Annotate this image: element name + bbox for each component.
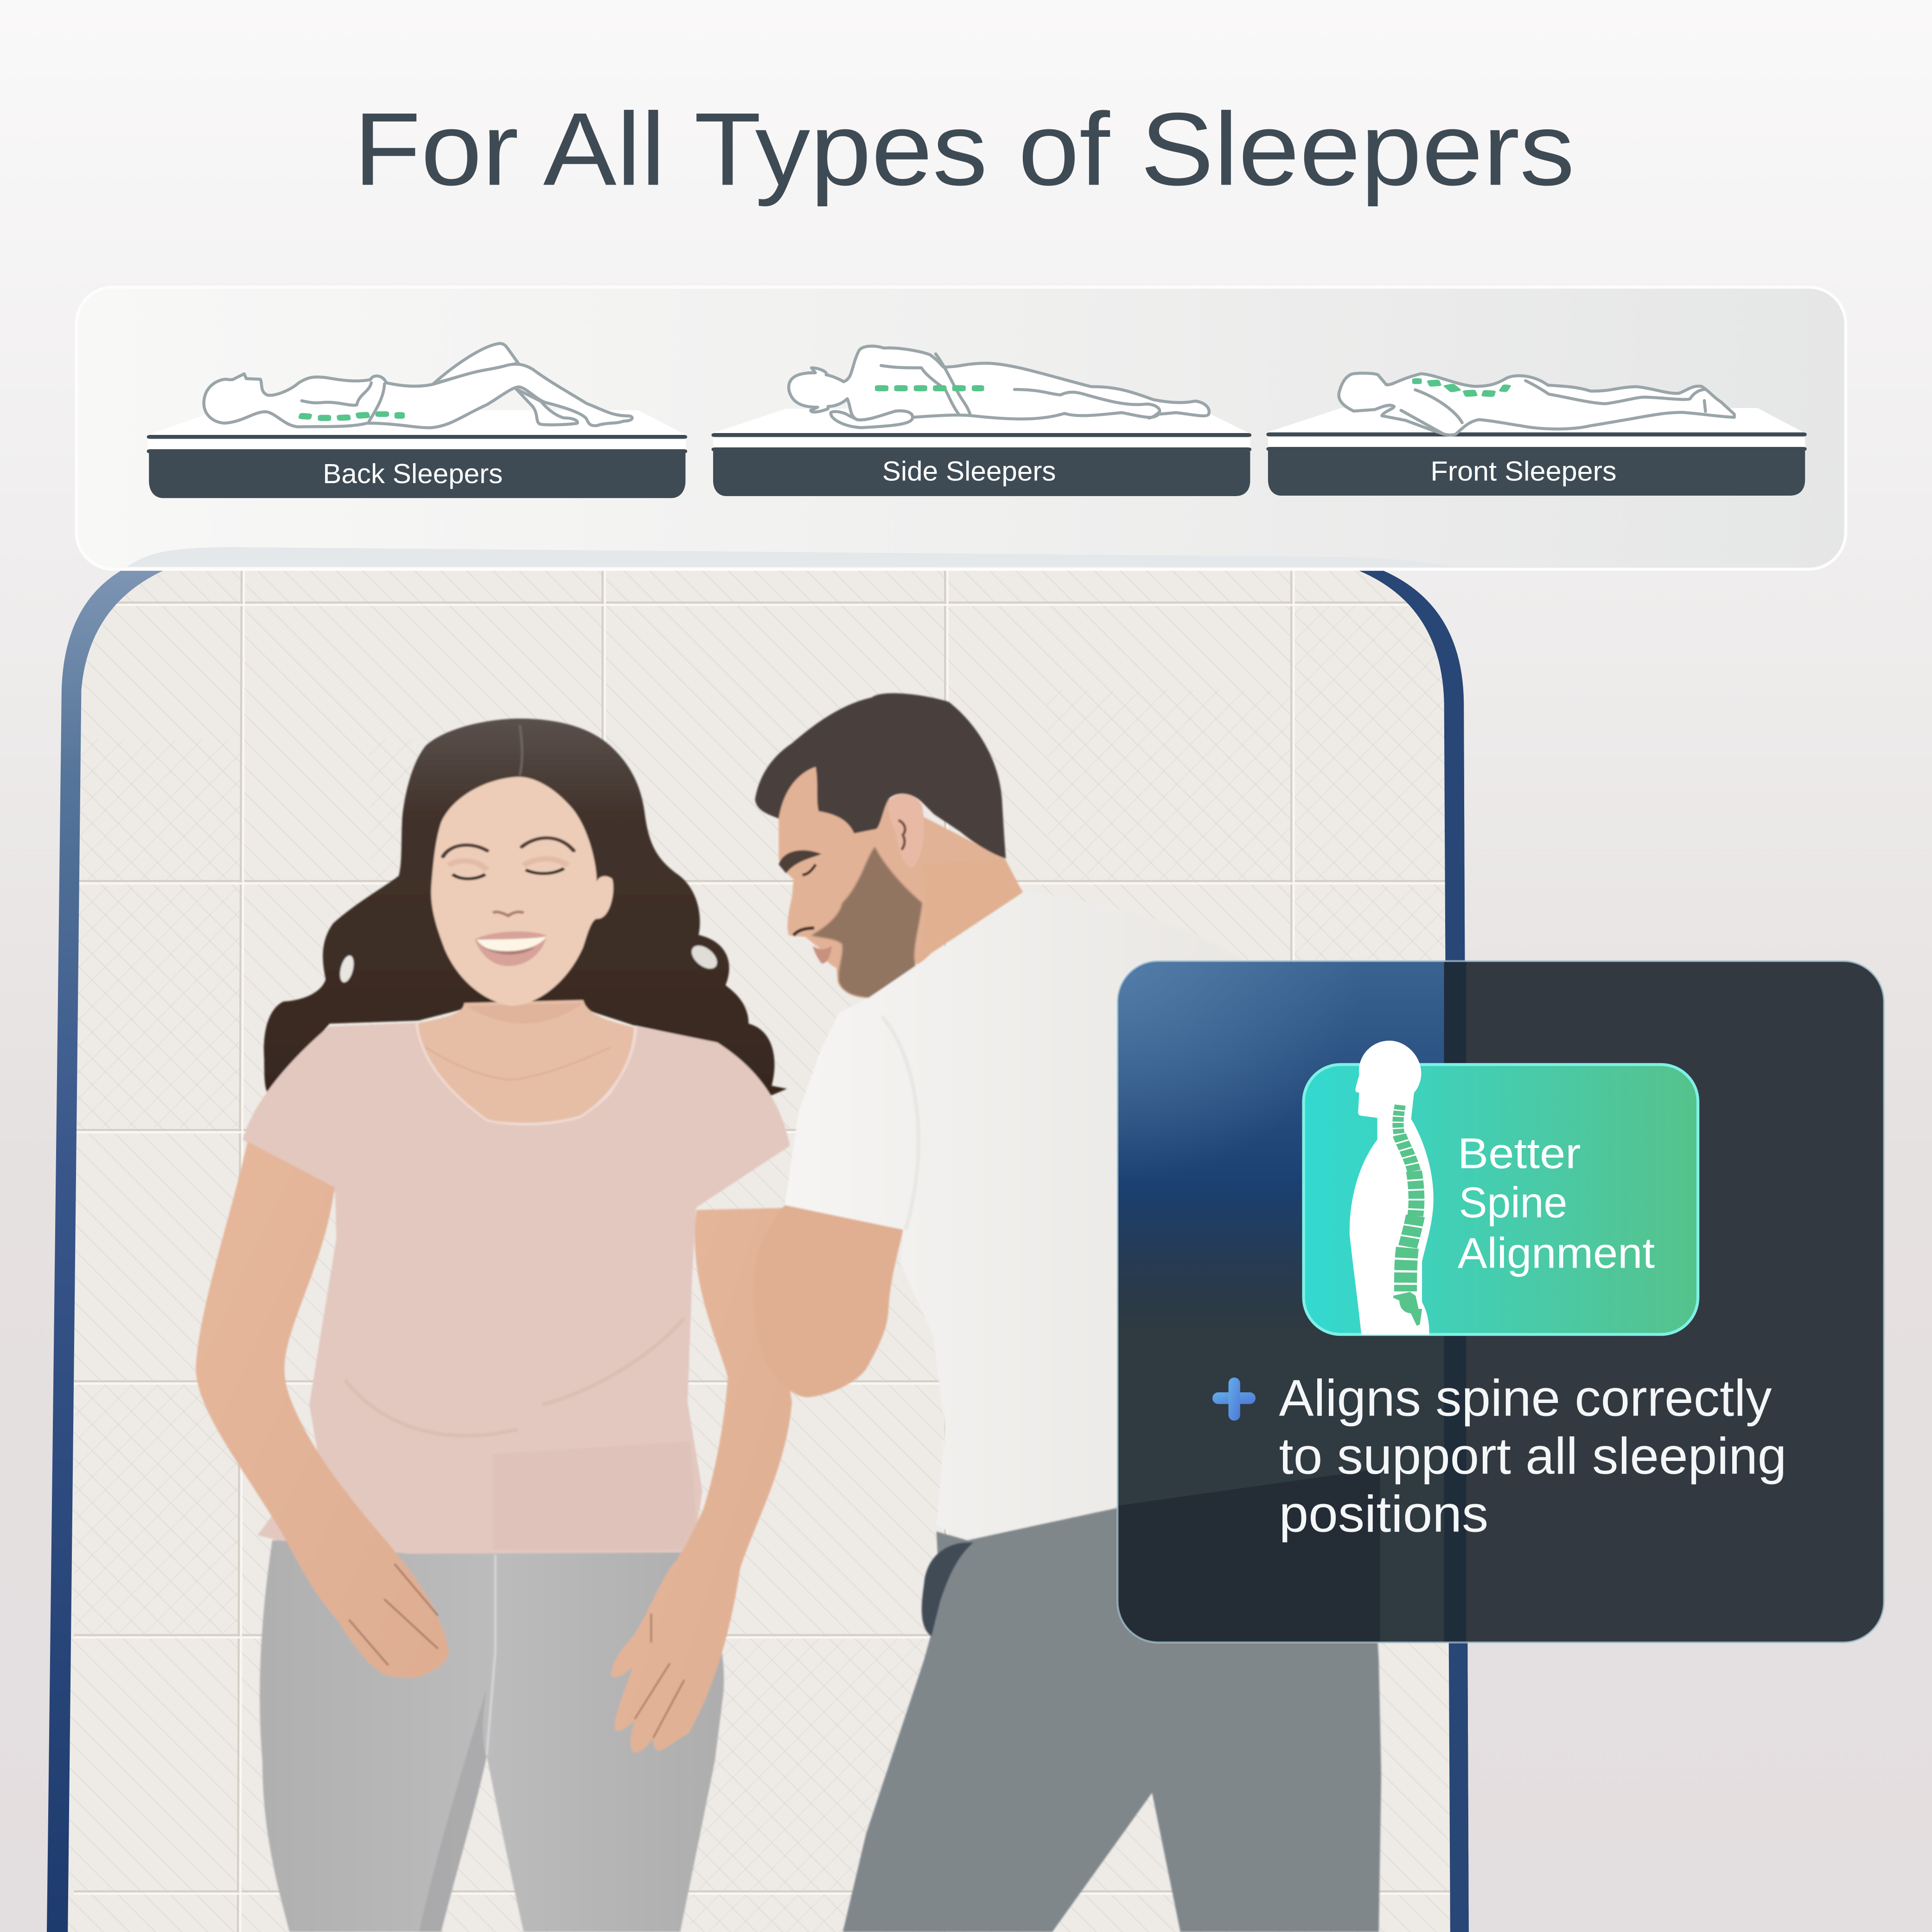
man eye (803, 865, 816, 875)
woman eyes (453, 868, 564, 879)
back mattress base (149, 453, 685, 498)
front sleeper icon (1267, 373, 1807, 496)
front mattress top (1267, 408, 1804, 432)
woman face (431, 777, 613, 1006)
woman hair (264, 719, 787, 1096)
side sleeper icon (712, 346, 1251, 496)
back sleeper icon (147, 344, 687, 498)
title: For All Types of Sleepers (354, 92, 1575, 207)
front spine dots (1412, 378, 1511, 397)
woman nose (493, 912, 524, 916)
back label: Back Sleepers (323, 458, 503, 489)
man pants (843, 1469, 1381, 1932)
icon: body silhouette with spine (1350, 1040, 1434, 1335)
sleeper positions panel (77, 287, 1846, 569)
mattress navy border (47, 569, 1469, 1932)
woman left arm and hand (196, 1141, 449, 1678)
front sleeper figure (1339, 373, 1734, 435)
badge label (1458, 1129, 1655, 1277)
card blue glow (1117, 961, 1466, 1642)
badge label: Alignment (1458, 1229, 1655, 1277)
mattress quilted top (49, 567, 1466, 1932)
man ear (888, 794, 924, 867)
benefit text: positions (1279, 1485, 1488, 1543)
man brow (779, 850, 822, 874)
woman pants (260, 1540, 724, 1932)
side spine dots (875, 385, 984, 391)
front mattress base (1268, 451, 1805, 496)
side sleeper figure (789, 346, 1209, 427)
photo: woman (196, 719, 792, 1932)
badge label: Better (1458, 1129, 1581, 1177)
spine badge (1304, 1040, 1698, 1335)
photo: man (753, 693, 1381, 1932)
back mattress top (148, 410, 686, 435)
man head (755, 693, 1023, 998)
man hair (755, 693, 1006, 859)
icon: plus (1212, 1377, 1256, 1421)
badge label: Spine (1459, 1179, 1567, 1227)
mattress edge seen through glass (127, 547, 1454, 567)
woman mouth (475, 931, 547, 966)
man mouth (813, 946, 832, 963)
woman shirt (243, 1023, 790, 1554)
mattress right edge (1355, 569, 1469, 1932)
benefit text: to support all sleeping (1279, 1427, 1786, 1485)
man hand behind (922, 1543, 973, 1636)
side mattress top (713, 409, 1249, 433)
man arm (753, 1205, 903, 1397)
woman right arm and hand (611, 1208, 792, 1753)
woman brows (443, 838, 574, 857)
mattress photo (47, 567, 1469, 1932)
spine alignment callout card (1117, 961, 1884, 1642)
side label: Side Sleepers (882, 455, 1056, 486)
card glass background (1117, 961, 1884, 1642)
man shirt (785, 891, 1374, 1540)
benefit text (1279, 1369, 1786, 1543)
back sleeper figure (204, 344, 632, 428)
benefit text: Aligns spine correctly (1279, 1369, 1772, 1427)
front label: Front Sleepers (1430, 455, 1617, 486)
back spine dots (298, 411, 405, 421)
spine vertebrae (1398, 1105, 1416, 1291)
man beard (811, 847, 922, 998)
man nostril (793, 928, 814, 936)
man skin (779, 767, 1023, 998)
side mattress base (713, 451, 1250, 496)
woman chest and neck (416, 777, 636, 1124)
